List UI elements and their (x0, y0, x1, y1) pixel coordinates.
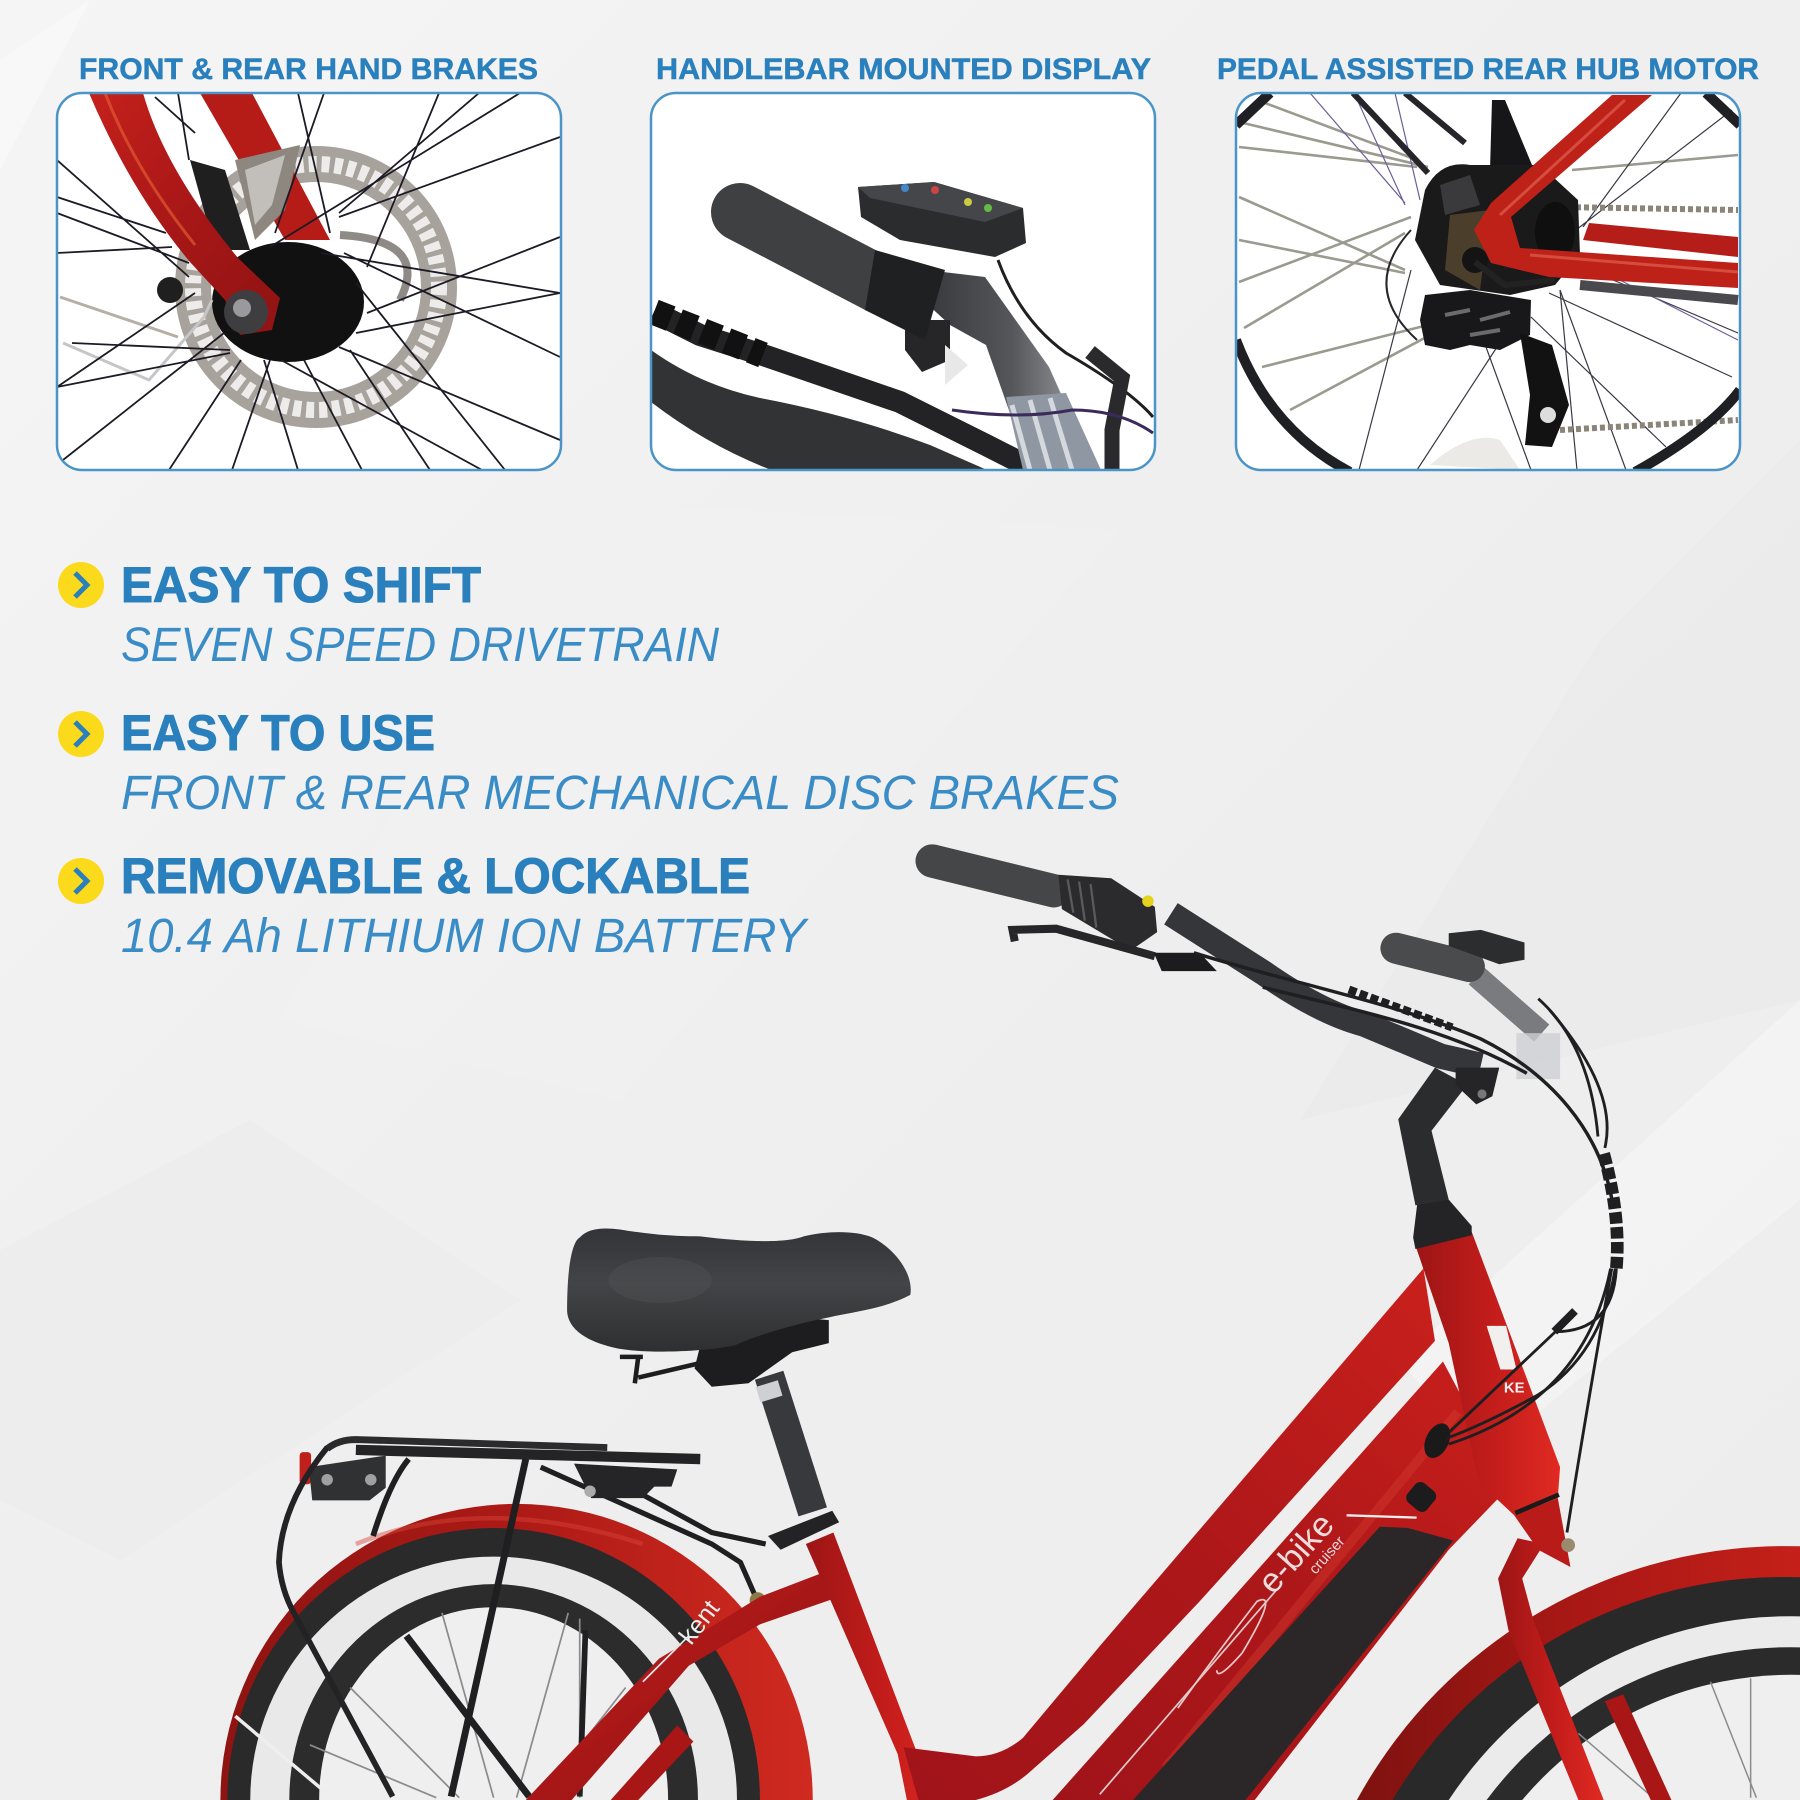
icon: yellow chevron bullet (58, 858, 104, 904)
feature heading: REMOVABLE & LOCKABLE (121, 848, 750, 904)
model sublabel: cruiser (1306, 1533, 1348, 1578)
feature: easy to shift (58, 557, 719, 672)
feature: removable and lockable (58, 848, 809, 963)
heading: pedal assisted rear hub motor: PEDAL ASSISTED REAR HUB MOTOR (1217, 53, 1759, 86)
front wheel and fender (1357, 1546, 1800, 1800)
right grip and display (1396, 930, 1560, 1079)
photo: grip and display (651, 93, 1155, 480)
saddle (567, 1228, 911, 1387)
photo: front wheel disc brake (57, 93, 561, 470)
frame top tube (903, 1268, 1435, 1800)
feature description: 10.4 Ah LITHIUM ION BATTERY (121, 910, 809, 963)
panel: front and rear hand brakes (57, 53, 561, 470)
heading: handlebar mounted display: HANDLEBAR MOUNTED DISPLAY (656, 53, 1151, 86)
seatpost (756, 1375, 839, 1550)
photo: rear hub and derailleur (1236, 93, 1740, 472)
brand lettering: KE (1504, 1379, 1525, 1396)
rear stays (526, 1570, 836, 1800)
icon: yellow chevron bullet (58, 562, 104, 608)
bike illustration (220, 861, 1800, 1800)
panel: pedal assisted rear hub motor (1217, 53, 1759, 472)
feature heading: EASY TO SHIFT (121, 557, 481, 613)
rear wheel and fender (220, 1504, 813, 1800)
model lettering: kent (674, 1595, 725, 1650)
feature heading: EASY TO USE (121, 705, 435, 761)
model lettering: e-bike (1251, 1506, 1342, 1601)
frame down tube (1053, 1361, 1510, 1800)
panel: handlebar mounted display (651, 53, 1155, 480)
head tube (1403, 1200, 1560, 1515)
heading: front and rear hand brakes: FRONT & REAR HAND BRAKES (79, 53, 538, 86)
fork (1498, 1495, 1671, 1800)
seat tube (806, 1533, 953, 1800)
battery (1133, 1527, 1453, 1800)
feature: easy to use (58, 705, 1119, 820)
feature description: FRONT & REAR MECHANICAL DISC BRAKES (121, 767, 1119, 820)
cables (1194, 953, 1617, 1533)
left grip and shifter (932, 861, 1217, 971)
icon: yellow chevron bullet (58, 711, 104, 757)
rear rack (279, 1440, 766, 1797)
handlebar (1171, 914, 1499, 1205)
feature description: SEVEN SPEED DRIVETRAIN (121, 619, 719, 672)
